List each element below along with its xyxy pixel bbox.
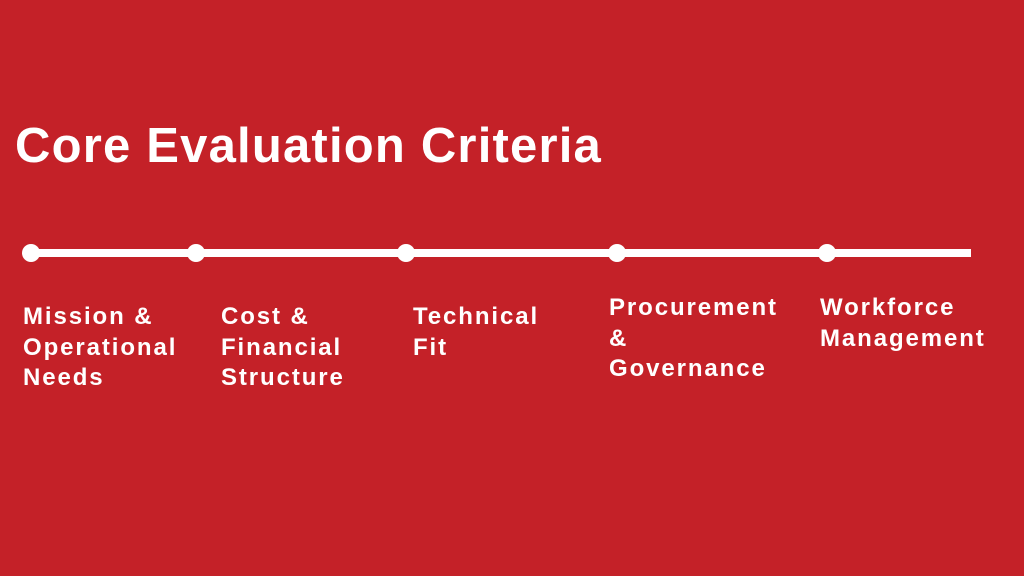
title: Core Evaluation Criteria [15,119,602,173]
label: cost: Financial [221,334,342,360]
label: procurement [609,294,778,382]
dot 1 [22,244,40,262]
label: procurement: & [609,324,628,352]
label: cost [221,303,345,391]
label: workforce [820,294,986,352]
dot 4 [608,244,626,262]
label: mission: Mission & [23,303,153,330]
label: mission [23,303,177,391]
label: technical: Fit [413,334,448,360]
label: mission: Needs [23,364,105,391]
label: cost: Structure [221,364,345,391]
label: workforce: Workforce [820,294,955,321]
dot 2 [187,244,205,262]
dot 5 [818,244,836,262]
label: mission: Operational [23,334,177,360]
label: procurement: Procurement [609,294,778,321]
label: technical: Technical [413,303,539,330]
label: workforce: Management [820,324,986,352]
label: procurement: Governance [609,355,767,382]
label: cost: Cost & [221,303,310,330]
dot 3 [397,244,415,262]
label: technical [413,303,539,360]
